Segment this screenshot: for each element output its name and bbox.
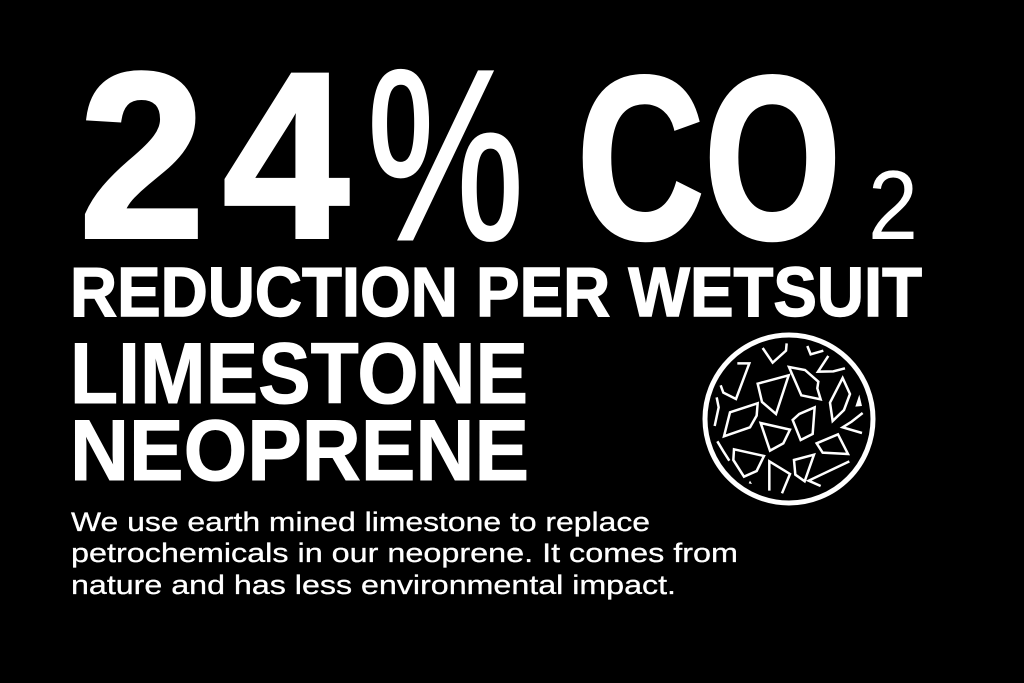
icon fragments (715, 343, 863, 493)
heading: limestone neoprene (70, 326, 529, 499)
percent sign: % (367, 20, 524, 291)
headline digit 2: 2 (79, 24, 205, 288)
CO: CO (577, 29, 841, 288)
headline: 24% CO2 (79, 20, 918, 291)
headline digit 4: 4 (223, 24, 349, 288)
heading line 1: LIMESTONE (70, 326, 528, 422)
heading line 2: NEOPRENE (70, 403, 529, 499)
icon outer ring (705, 335, 873, 503)
paragraph line 1: We use earth mined limestone to replace (71, 507, 650, 537)
subscript 2: 2 (868, 150, 918, 260)
icon: limestone particles in circle (705, 335, 873, 503)
icon small filled specks (749, 395, 862, 484)
paragraph line 2: petrochemicals in our neoprene. It comes from (71, 538, 738, 568)
subheading: REDUCTION PER WETSUIT (70, 253, 922, 331)
body paragraph (71, 507, 738, 600)
paragraph line 3: nature and has less environmental impact. (71, 570, 676, 600)
